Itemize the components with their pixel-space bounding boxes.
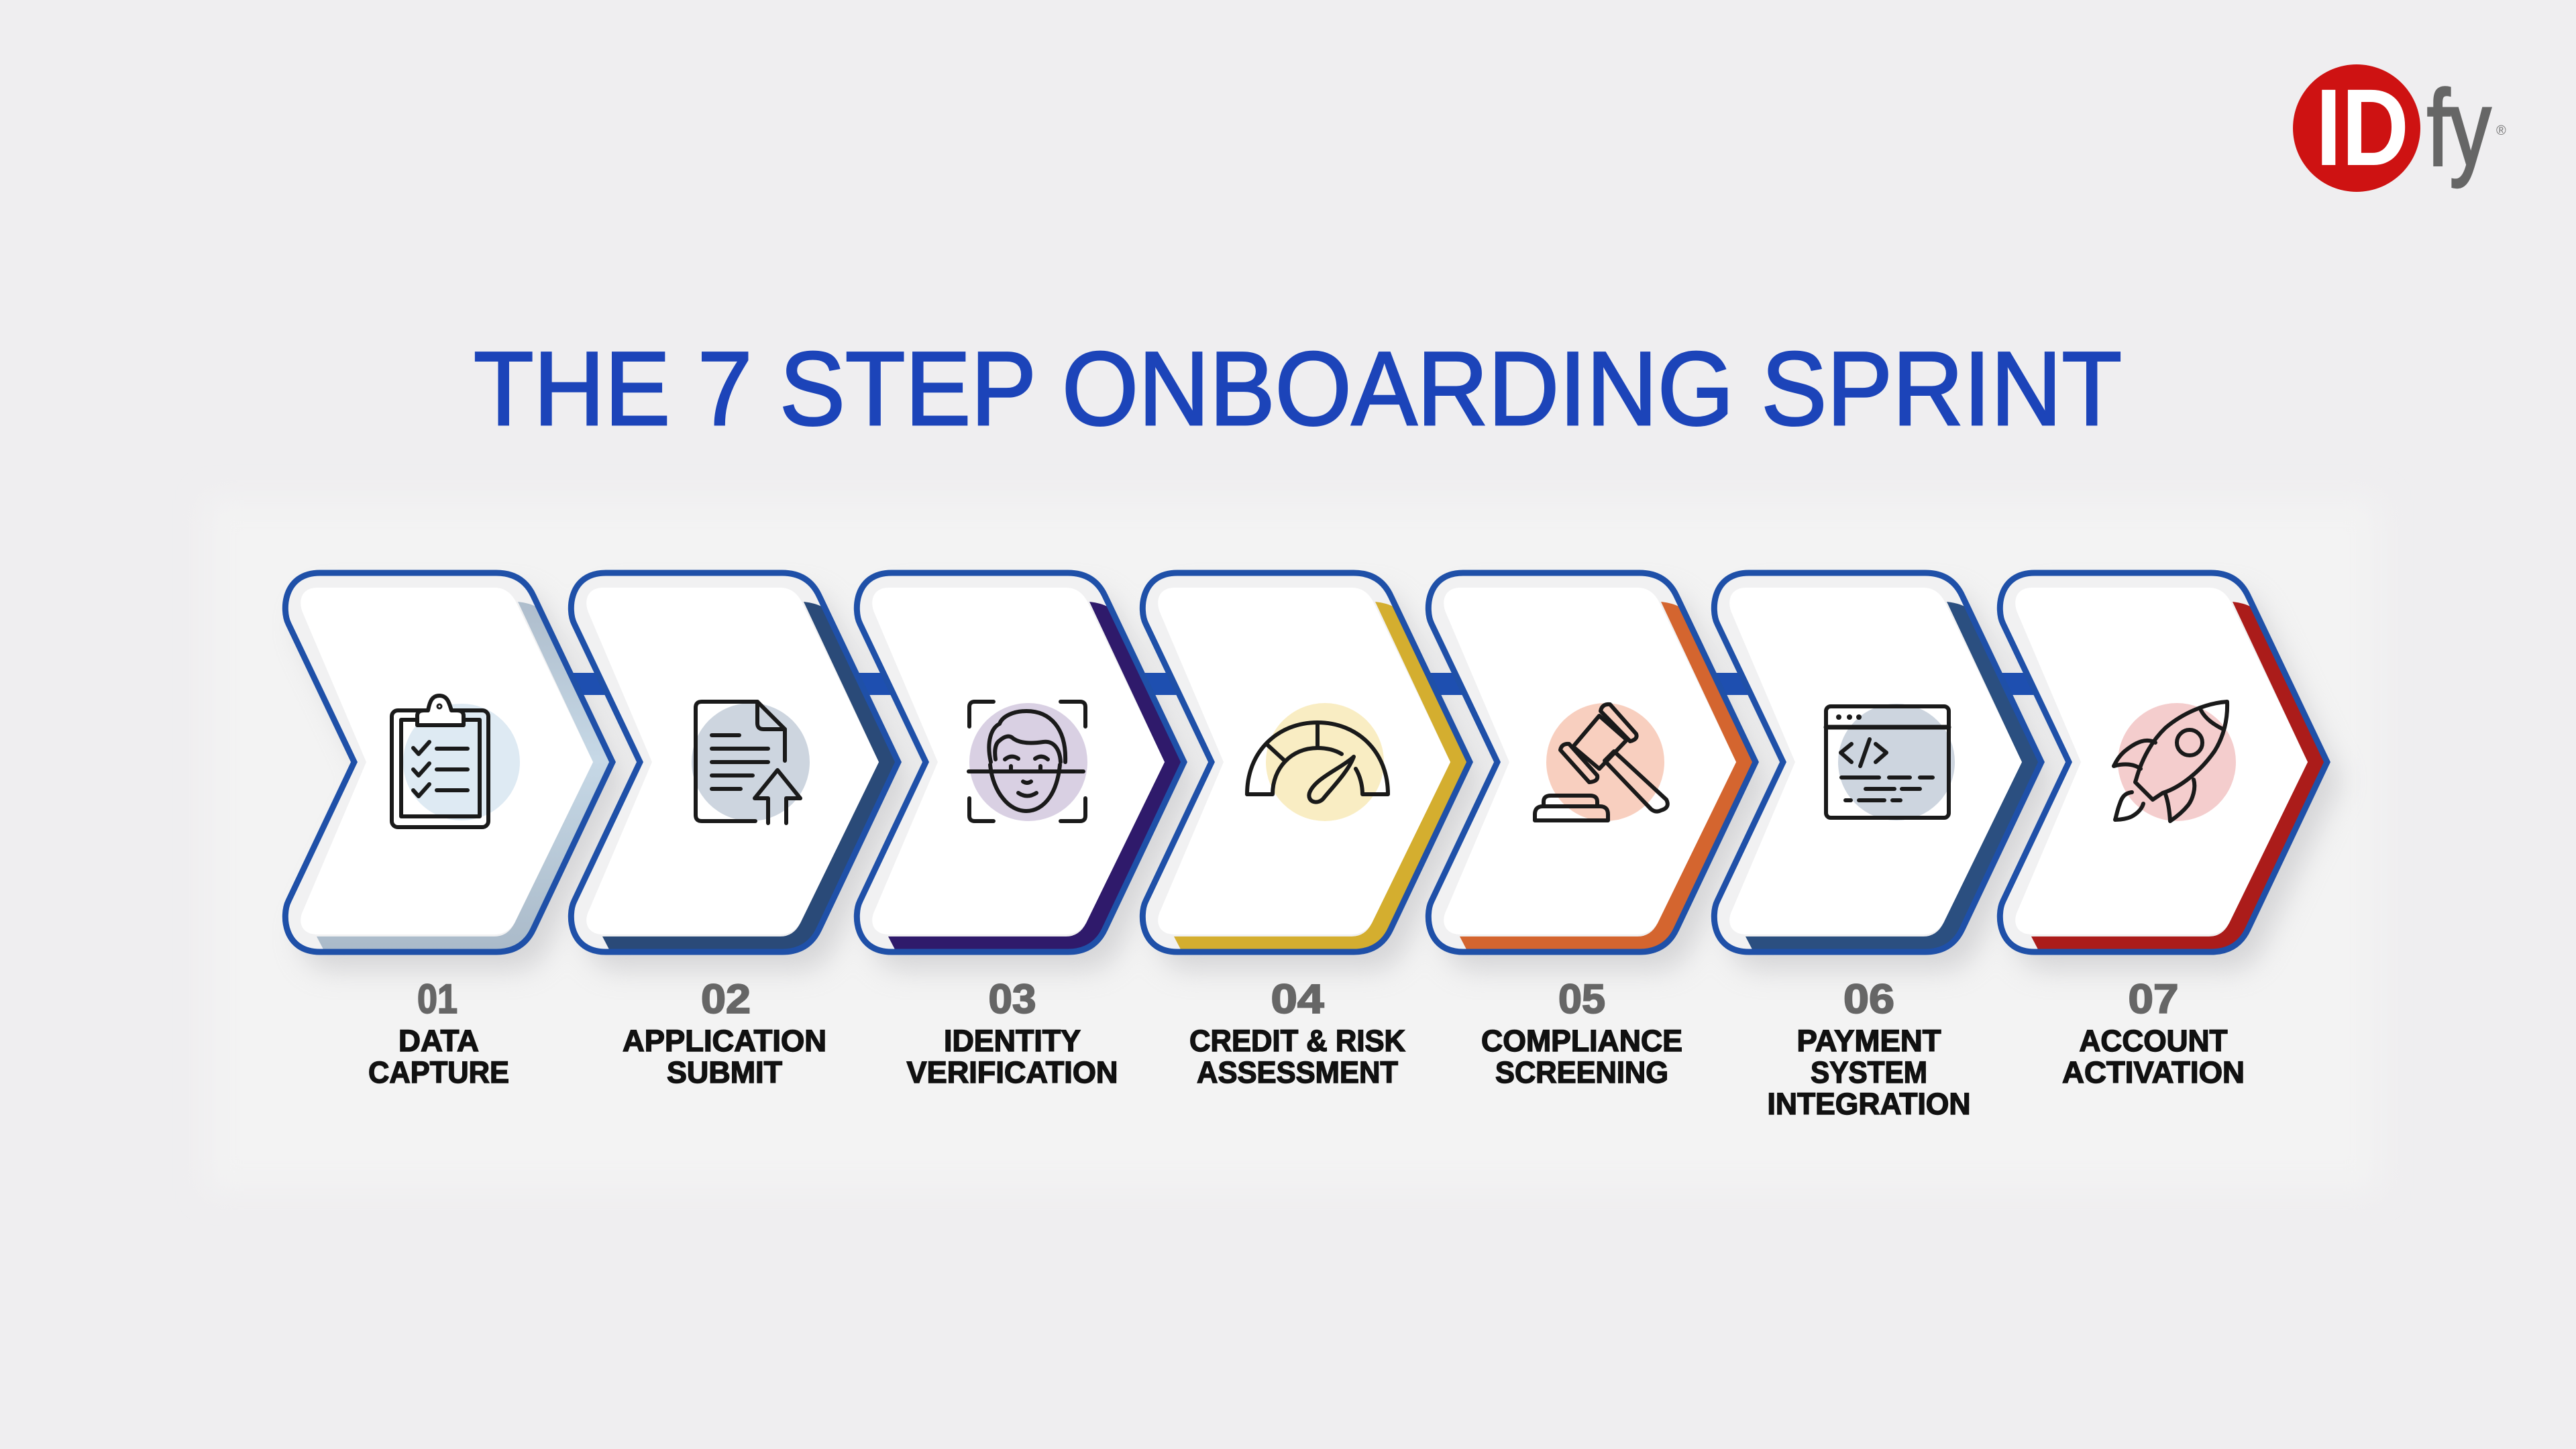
number 03: 03 xyxy=(989,976,1036,1022)
label: credit and risk assessment: ASSESSMENT xyxy=(1197,1055,1398,1089)
label: compliance screening: COMPLIANCE xyxy=(1481,1024,1682,1058)
number 01: 01 xyxy=(417,976,458,1022)
number 05: 05 xyxy=(1558,976,1605,1022)
step 04: credit and risk assessment xyxy=(1142,573,1470,1089)
label: payment system integration: PAYMENT xyxy=(1796,1024,1941,1058)
label: credit and risk assessment: CREDIT & RISK xyxy=(1189,1024,1405,1058)
label: account activation xyxy=(2062,1024,2245,1089)
number 04: 04 xyxy=(1271,976,1324,1022)
label: payment system integration xyxy=(1767,1024,1971,1121)
step 07: account activation xyxy=(2000,573,2327,1089)
step 02: application submit xyxy=(571,573,898,1089)
label: identity verification: IDENTITY xyxy=(944,1024,1081,1058)
lighter content panel xyxy=(208,500,2378,1191)
label: application submit: APPLICATION xyxy=(623,1024,826,1058)
card drop shadows xyxy=(300,592,2342,971)
chevron 07 xyxy=(2000,573,2327,952)
logo: IDfy: ® xyxy=(2496,123,2506,138)
label: data capture xyxy=(368,1024,509,1089)
label: data capture: DATA xyxy=(398,1024,479,1058)
label: compliance screening: SCREENING xyxy=(1495,1055,1668,1089)
step 01: data capture xyxy=(285,573,612,1089)
step 05: compliance screening xyxy=(1428,573,1756,1089)
step 03: identity verification xyxy=(857,573,1184,1089)
label: compliance screening xyxy=(1481,1024,1682,1089)
label: payment system integration: INTEGRATION xyxy=(1767,1087,1971,1121)
chevron 01 xyxy=(285,573,612,952)
chevron 02 xyxy=(571,573,898,952)
title: THE 7 STEP ONBOARDING SPRINT xyxy=(474,331,2122,447)
label: payment system integration: SYSTEM xyxy=(1811,1055,1927,1089)
number 02: 02 xyxy=(701,976,751,1022)
logo: IDfy: ID xyxy=(2316,66,2409,189)
icon: gavel xyxy=(1535,703,1668,821)
label: application submit: SUBMIT xyxy=(667,1055,782,1089)
chevron 04 xyxy=(1142,573,1470,952)
logo: IDfy: fy xyxy=(2427,68,2491,188)
label: account activation: ACCOUNT xyxy=(2080,1024,2227,1058)
label: data capture: CAPTURE xyxy=(368,1055,509,1089)
label: application submit xyxy=(623,1024,826,1089)
label: credit and risk assessment xyxy=(1189,1024,1405,1089)
chevron 03 xyxy=(857,573,1184,952)
number 06: 06 xyxy=(1843,976,1894,1022)
icon: clipboard checklist xyxy=(392,696,520,827)
icon: document upload xyxy=(692,702,810,823)
logo: IDfy xyxy=(2293,64,2506,192)
step 06: payment system integration xyxy=(1714,573,2041,1121)
number 07: 07 xyxy=(2128,976,2179,1022)
icon: rocket xyxy=(2114,702,2236,821)
connectors between chevrons xyxy=(564,673,2049,695)
chevron 06 xyxy=(1714,573,2041,952)
icon: face scan xyxy=(969,702,1087,821)
label: identity verification xyxy=(907,1024,1118,1089)
chevron 05 xyxy=(1428,573,1756,952)
label: identity verification: VERIFICATION xyxy=(907,1055,1118,1089)
icon: code window xyxy=(1826,704,1955,820)
icon: credit gauge xyxy=(1247,703,1388,821)
label: account activation: ACTIVATION xyxy=(2062,1055,2245,1089)
